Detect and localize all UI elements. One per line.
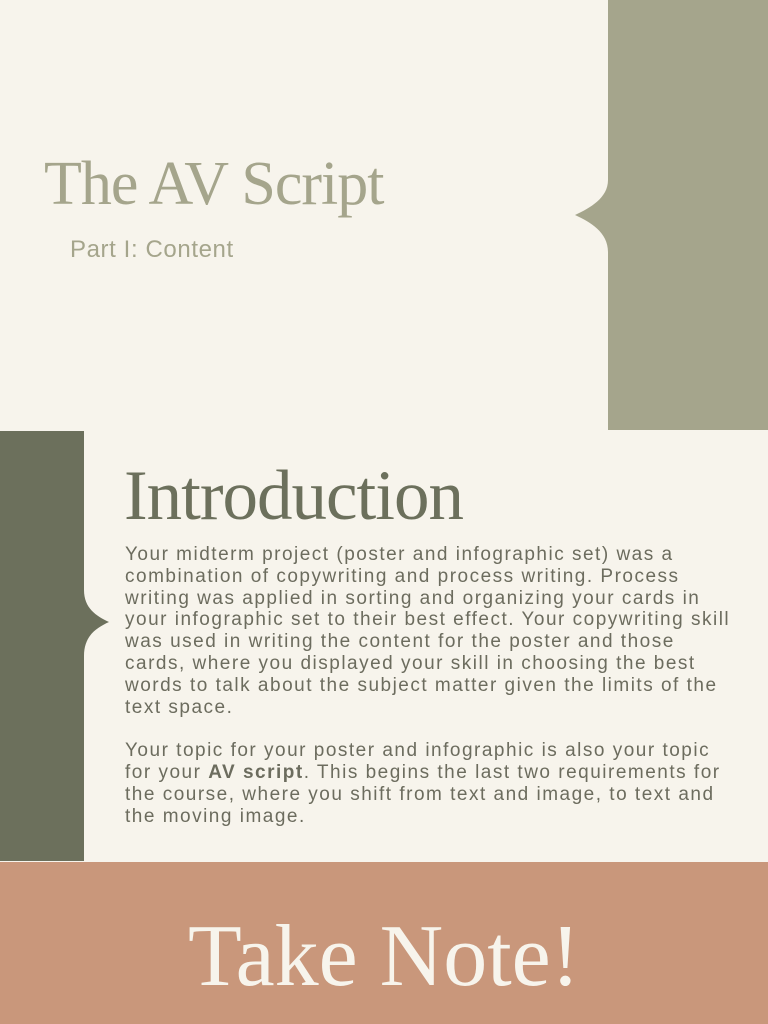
title: The AV Script <box>44 150 384 218</box>
text block: introduction body: for your AV script. This begins the last two requirements for <box>125 762 721 783</box>
text block: introduction body: words to talk about the subject matter given the limits of the <box>125 675 718 696</box>
heading: Take Note!: Take Note! <box>188 908 580 1005</box>
text block: introduction body: the moving image. <box>125 806 306 827</box>
text block: introduction body: the course, where you shift from text and image, to text and <box>125 784 715 805</box>
text block: introduction body: your infographic set to their best effect. Your copywriting skill <box>125 609 730 630</box>
text block: introduction body: Your midterm project (poster and infographic set) was a <box>125 544 674 565</box>
text block: introduction body: cards, where you displayed your skill in choosing the best <box>125 653 696 674</box>
text block: introduction body: text space. <box>125 697 233 718</box>
subtitle: Part I: Content <box>70 236 234 263</box>
text block: introduction body: combination of copywriting and process writing. Process <box>125 566 680 587</box>
text block: introduction body <box>125 544 730 827</box>
heading: Introduction: Introduction <box>124 457 463 535</box>
text block: introduction body: Your topic for your poster and infographic is also your topic <box>125 740 710 761</box>
text block: introduction body: writing was applied in sorting and organizing your cards in <box>125 588 700 609</box>
text block: introduction body: was used in writing the content for the poster and those <box>125 631 675 652</box>
